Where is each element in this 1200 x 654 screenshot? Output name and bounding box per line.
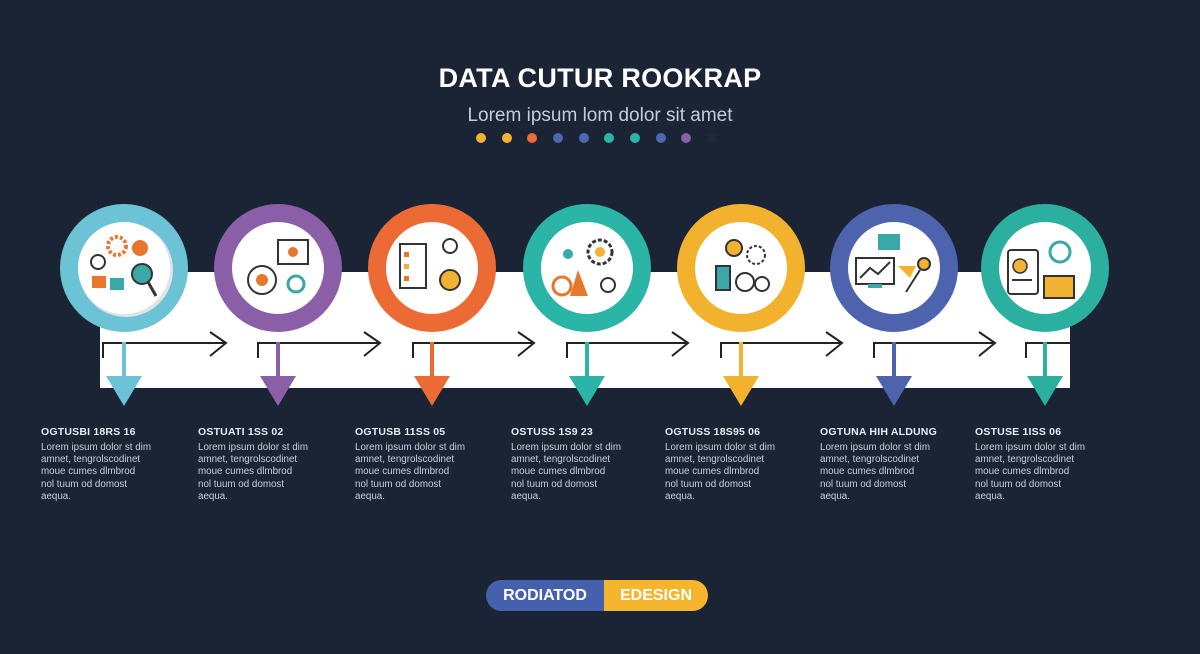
text block 2: Lorem ipsum dolor st dim — [198, 442, 308, 453]
text block 6: Lorem ipsum dolor st dim — [820, 442, 930, 453]
text block 2: OSTUATI 1SS 02 — [198, 426, 283, 438]
text block 1: moue cumes dlmbrod — [41, 466, 135, 477]
roadmap timeline — [60, 204, 1109, 406]
stage 5 — [677, 204, 842, 406]
footer badge: RODIATOD — [503, 587, 587, 604]
title: DATA CUTUR ROOKRAP — [439, 63, 761, 93]
white band — [100, 272, 1070, 388]
text block 2: nol tuum od domost — [198, 479, 284, 490]
text block 3: moue cumes dlmbrod — [355, 466, 449, 477]
text block 7: moue cumes dlmbrod — [975, 466, 1069, 477]
text block 4: nol tuum od domost — [511, 479, 597, 490]
text block 7: aequa. — [975, 491, 1005, 502]
text block 7 — [975, 426, 1085, 502]
text block 4 — [511, 426, 621, 502]
text block 2: moue cumes dlmbrod — [198, 466, 292, 477]
text block 6 — [820, 426, 937, 502]
stage 1 — [60, 204, 226, 406]
text block 6: nol tuum od domost — [820, 479, 906, 490]
text block 4: moue cumes dlmbrod — [511, 466, 605, 477]
subtitle: Lorem ipsum lom dolor sit amet — [467, 105, 733, 126]
text block 6: OGTUNA HIH ALDUNG — [820, 426, 937, 438]
text block 5: Lorem ipsum dolor st dim — [665, 442, 775, 453]
text block 4: OSTUSS 1S9 23 — [511, 426, 593, 438]
stage 4 — [523, 204, 688, 406]
stage 2 — [214, 204, 380, 406]
text block 5: OGTUSS 18S95 06 — [665, 426, 760, 438]
text block 7: nol tuum od domost — [975, 479, 1061, 490]
text block 2 — [198, 426, 308, 502]
text block 5: amnet, tengrolscodinet — [665, 454, 764, 465]
stage 6 — [830, 204, 995, 406]
stage 7 — [981, 204, 1109, 406]
text block 3: nol tuum od domost — [355, 479, 441, 490]
text block 3: OGTUSB 11SS 05 — [355, 426, 445, 438]
text block 4: amnet, tengrolscodinet — [511, 454, 610, 465]
text block 4: Lorem ipsum dolor st dim — [511, 442, 621, 453]
text block 5: moue cumes dlmbrod — [665, 466, 759, 477]
text block 6: moue cumes dlmbrod — [820, 466, 914, 477]
text block 1: nol tuum od domost — [41, 479, 127, 490]
text block 1: Lorem ipsum dolor st dim — [41, 442, 151, 453]
text block 3 — [355, 426, 465, 502]
text block 1: aequa. — [41, 491, 71, 502]
text block 4: aequa. — [511, 491, 541, 502]
text block 3: amnet, tengrolscodinet — [355, 454, 454, 465]
dots row — [476, 133, 691, 143]
text block 3: Lorem ipsum dolor st dim — [355, 442, 465, 453]
text block 6: amnet, tengrolscodinet — [820, 454, 919, 465]
footer badge: EDESIGN — [620, 587, 692, 604]
text block 2: aequa. — [198, 491, 228, 502]
text block 2: amnet, tengrolscodinet — [198, 454, 297, 465]
text block 5 — [665, 426, 775, 502]
text block 5: aequa. — [665, 491, 695, 502]
text block 7: amnet, tengrolscodinet — [975, 454, 1074, 465]
text block 1: amnet, tengrolscodinet — [41, 454, 140, 465]
text block 3: aequa. — [355, 491, 385, 502]
text block 5: nol tuum od domost — [665, 479, 751, 490]
text block 1 — [41, 426, 151, 502]
footer badge — [486, 580, 708, 611]
text block 6: aequa. — [820, 491, 850, 502]
stage 3 — [368, 204, 534, 406]
text block 7: Lorem ipsum dolor st dim — [975, 442, 1085, 453]
text block 7: OSTUSE 1ISS 06 — [975, 426, 1061, 438]
text block 1: OGTUSBI 18RS 16 — [41, 426, 136, 438]
